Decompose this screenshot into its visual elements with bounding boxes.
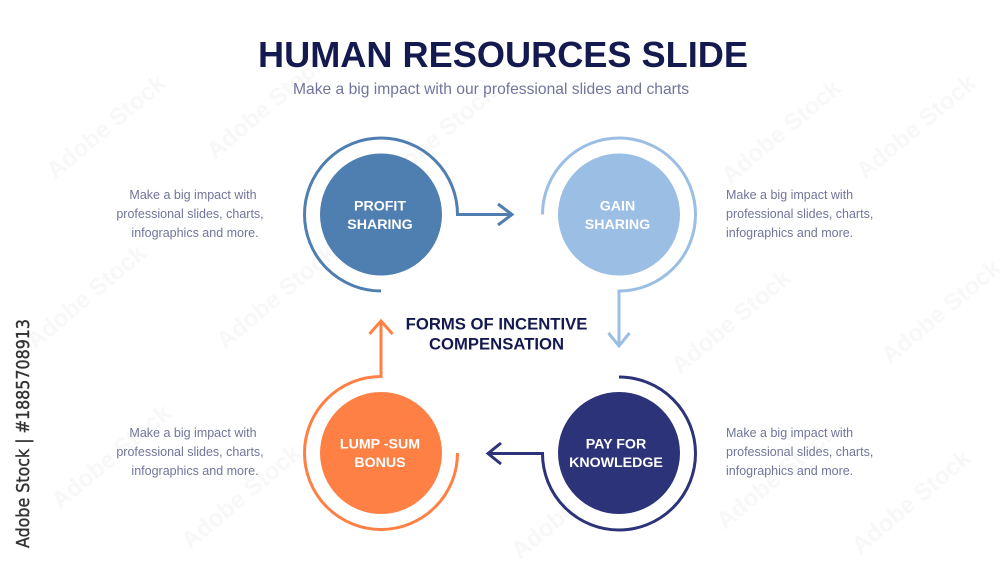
text block: top right: professional slides, charts, xyxy=(726,207,873,221)
label: gain sharing: GAIN xyxy=(600,198,635,214)
stock credit: Adobe Stock | #1885708913 xyxy=(14,319,34,548)
center heading: COMPENSATION xyxy=(429,334,564,354)
label: lump-sum bonus: LUMP -SUM xyxy=(340,436,420,452)
label: pay for knowledge: KNOWLEDGE xyxy=(569,455,663,471)
watermark pattern: Adobe Stock xyxy=(42,69,172,185)
circle: profit sharing xyxy=(320,154,442,276)
label: profit sharing: PROFIT xyxy=(354,198,406,214)
ring and arrow: profit sharing xyxy=(305,138,512,291)
watermark pattern: Adobe Stock xyxy=(177,439,307,555)
text block: bottom left: infographics and more. xyxy=(131,464,259,478)
text block: bottom right: professional slides, charts, xyxy=(726,445,873,459)
text block: top right: Make a big impact with xyxy=(726,188,853,202)
watermark pattern: Adobe Stock xyxy=(212,239,342,355)
ring and arrow: gain sharing xyxy=(542,138,696,346)
watermark pattern: Adobe Stock xyxy=(852,69,982,185)
watermark pattern: Adobe Stock xyxy=(667,264,797,380)
title: HUMAN RESOURCES SLIDE xyxy=(258,34,748,75)
text block: bottom right: Make a big impact with xyxy=(726,426,853,440)
watermark pattern: Adobe Stock xyxy=(712,419,842,535)
text block: bottom left: professional slides, charts, xyxy=(116,445,264,459)
label: gain sharing: SHARING xyxy=(585,217,650,233)
node: gain sharing xyxy=(542,138,696,346)
watermark pattern: Adobe Stock xyxy=(717,74,847,190)
watermark pattern: Adobe Stock xyxy=(507,449,637,563)
watermark pattern: Adobe Stock xyxy=(22,239,152,355)
subtitle: Make a big impact with our professional slides and charts xyxy=(293,81,689,98)
watermark pattern: Adobe Stock xyxy=(202,49,332,165)
node: profit sharing xyxy=(305,138,512,291)
label: pay for knowledge: PAY FOR xyxy=(586,436,646,452)
text block: top left: infographics and more. xyxy=(131,226,259,240)
text block: top left: Make a big impact with xyxy=(129,188,257,202)
text block: top right: infographics and more. xyxy=(726,226,853,240)
watermark pattern: Adobe Stock xyxy=(47,399,177,515)
ring and arrow: pay for knowledge xyxy=(488,377,696,530)
node: pay for knowledge xyxy=(488,377,696,530)
label: profit sharing: SHARING xyxy=(347,217,413,233)
text block: bottom right: infographics and more. xyxy=(726,464,853,478)
circle: lump-sum bonus xyxy=(320,392,442,514)
text block: bottom left: Make a big impact with xyxy=(129,426,257,440)
ring and arrow: lump-sum bonus xyxy=(305,321,458,530)
watermark pattern: Adobe Stock xyxy=(847,444,977,560)
label: lump-sum bonus: BONUS xyxy=(354,455,406,471)
circle: pay for knowledge xyxy=(558,392,680,514)
watermark pattern: Adobe Stock xyxy=(372,79,502,195)
node: lump-sum bonus xyxy=(305,321,458,530)
center heading: FORMS OF INCENTIVE xyxy=(406,314,587,334)
text block: top left: professional slides, charts, xyxy=(116,207,264,221)
circle: gain sharing xyxy=(558,154,680,276)
